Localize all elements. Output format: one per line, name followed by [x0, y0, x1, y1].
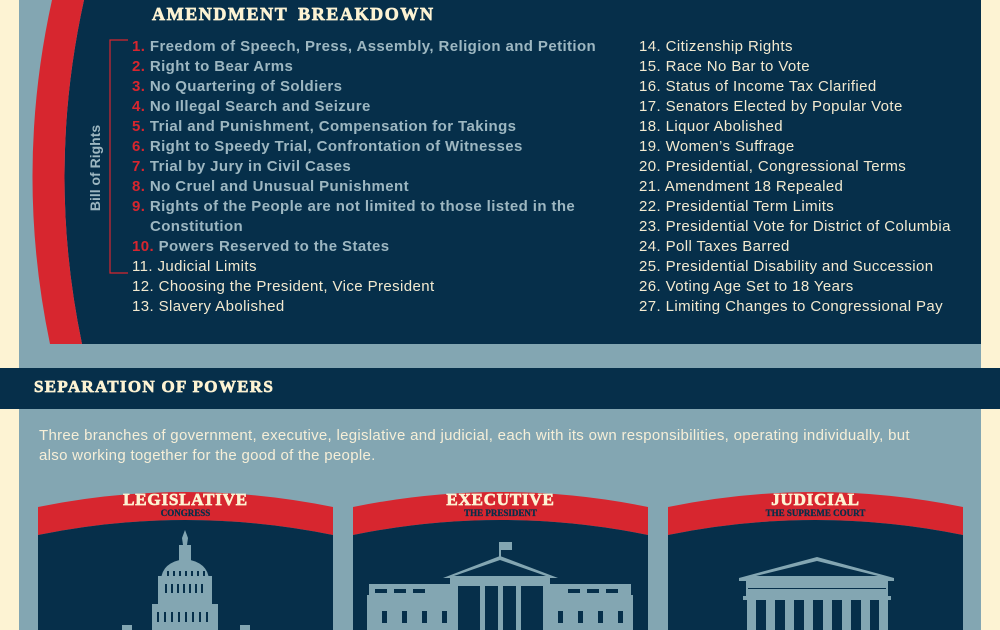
- list: amendments 1-13: 7. Trial by Jury in Civil Cases: [132, 158, 351, 175]
- subtitle: the supreme court: THE SUPREME COURT: [766, 508, 865, 518]
- list: amendments 14-27: 17. Senators Elected by Popular Vote: [639, 98, 903, 115]
- list: amendments 1-13: 10. Powers Reserved to the States: [132, 238, 389, 255]
- list: amendments 1-13: 5. Trial and Punishment, Compensation for Takings: [132, 118, 516, 135]
- title: legislative: LEGISLATIVE: [123, 490, 248, 509]
- list: amendments 14-27: 15. Race No Bar to Vote: [639, 58, 810, 75]
- heading bar: separation of powers: [0, 368, 1000, 409]
- list: amendments 14-27: 26. Voting Age Set to 18 Years: [639, 278, 854, 295]
- list: amendments 1-13: 4. No Illegal Search and Seizure: [132, 98, 371, 115]
- title: judicial: JUDICIAL: [771, 490, 860, 509]
- card: judicial: [668, 490, 963, 630]
- list: amendments 1-13: 1. Freedom of Speech, Press, Assembly, Religion and Petition: [132, 38, 596, 55]
- label: bill of rights: Bill of Rights: [87, 125, 103, 211]
- list: amendments 14-27: 18. Liquor Abolished: [639, 118, 783, 135]
- list: amendments 14-27: 19. Women’s Suffrage: [639, 138, 795, 155]
- list: amendments 1-13: 8. No Cruel and Unusual Punishment: [132, 178, 409, 195]
- list: amendments 14-27: 22. Presidential Term Limits: [639, 198, 834, 215]
- list: amendments 14-27: [639, 38, 951, 315]
- card: executive: [353, 490, 648, 630]
- list: amendments 14-27: 25. Presidential Disability and Succession: [639, 258, 933, 275]
- title: executive: EXECUTIVE: [446, 490, 555, 509]
- list: amendments 1-13: 11. Judicial Limits: [132, 258, 257, 275]
- card: legislative: [38, 490, 333, 630]
- subtitle: the president: THE PRESIDENT: [464, 508, 537, 518]
- subtitle: congress: CONGRESS: [161, 508, 210, 518]
- list: amendments 14-27: 16. Status of Income Tax Clarified: [639, 78, 877, 95]
- list: amendments 1-13: 9. Rights of the People are not limited to those listed in the: [132, 198, 575, 215]
- list: amendments 14-27: 21. Amendment 18 Repealed: [639, 178, 843, 195]
- list: amendments 1-13: [132, 38, 596, 315]
- list: amendments 14-27: 20. Presidential, Congressional Terms: [639, 158, 906, 175]
- list: amendments 1-13: 2. Right to Bear Arms: [132, 58, 293, 75]
- list: amendments 1-13: 6. Right to Speedy Trial, Confrontation of Witnesses: [132, 138, 523, 155]
- list: amendments 14-27: 23. Presidential Vote for District of Columbia: [639, 218, 951, 235]
- text: separation description: Three branches of government, executive, legislative and judicial, each with its own responsibilities, operating individually, but also working together for the good of the people.: [39, 427, 910, 464]
- list: amendments 14-27: 27. Limiting Changes to Congressional Pay: [639, 298, 943, 315]
- heading: amendment breakdown: AMENDMENT BREAKDOWN: [152, 4, 435, 24]
- list: amendments 14-27: 24. Poll Taxes Barred: [639, 238, 790, 255]
- panel: amendment breakdown: [32, 0, 981, 344]
- list: amendments 1-13: Constitution: [150, 218, 243, 235]
- list: amendments 1-13: 3. No Quartering of Soldiers: [132, 78, 342, 95]
- list: amendments 1-13: 13. Slavery Abolished: [132, 298, 285, 315]
- heading bar: separation of powers: SEPARATION OF POWERS: [34, 377, 274, 396]
- list: amendments 14-27: 14. Citizenship Rights: [639, 38, 793, 55]
- list: amendments 1-13: 12. Choosing the President, Vice President: [132, 278, 435, 295]
